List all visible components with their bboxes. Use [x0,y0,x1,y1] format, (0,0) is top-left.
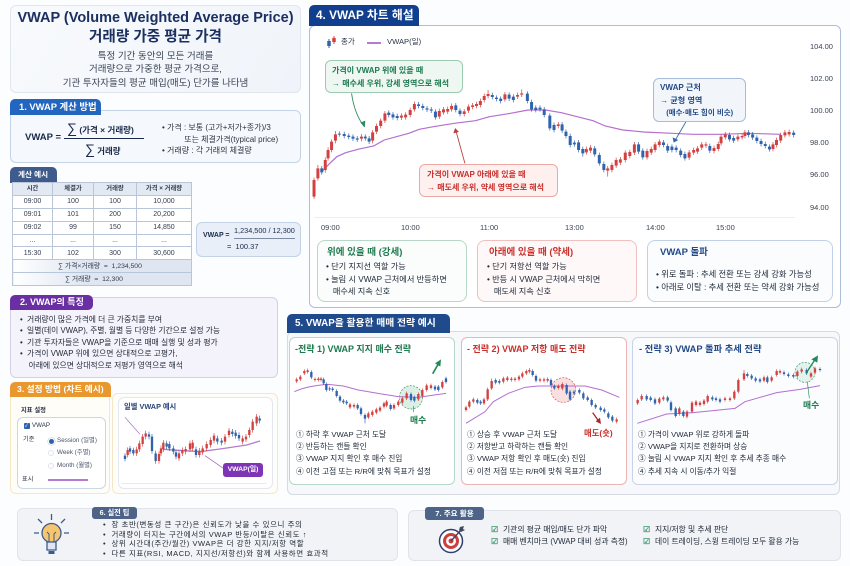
strategy 2 steps: ④ 이전 저점 또는 R/R에 맞춰 목표가 설정 [467,467,602,476]
table: calculation example: 14,850 [153,224,175,231]
example heading: 일별 VWAP 예시 [124,402,176,411]
strategy 1 steps: ③ VWAP 지지 확인 후 매수 진입 [296,454,402,463]
chart: daily VWAP candles [122,414,267,484]
formula notes: • 거래량 : 각 거래의 체결량 [162,146,252,155]
table: calculation example: 150 [109,224,121,231]
panel: daily VWAP example [112,393,278,494]
table: calculation example: 09:00 [24,198,41,205]
use 2: ☑ [491,537,498,546]
formula denominator: ∑ 거래량 [85,141,120,157]
card list: • 단기 저항선 역할 가능 [487,262,567,271]
table: calculation example: 30,600 [153,250,175,257]
table: calculation example: 300 [109,250,121,257]
chart: main candlesticks and VWAP [312,89,796,218]
example card [118,397,273,489]
y axis labels: 94.00 [810,203,829,212]
table: calculation example: ... [112,237,118,244]
y axis labels: 102.00 [810,74,833,83]
card list [656,269,819,292]
strategy 3 steps [638,430,786,476]
callout: above VWAP [325,60,463,93]
table: calculation example: 200 [109,211,121,218]
panel: VWAP features [10,297,278,378]
tag: section 4 [309,5,419,26]
formula notes: • 가격 : 보통 (고가+저가+종가)/3 [162,123,271,132]
chart: strategy 1 [294,359,448,424]
card list: • 반등 시 VWAP 근처에서 막히면 [487,275,600,284]
panel: VWAP chart interpretation [309,25,841,308]
checkbox VWAP [24,423,30,429]
strategy 3 steps: ④ 추세 지속 시 이동/추가 익절 [638,467,736,476]
use 4: ☑ [643,537,650,546]
table: calculation example: 100 [109,198,121,205]
table: calculation example [12,182,192,286]
tag: section 4: 4. VWAP 차트 해설 [316,8,414,22]
tag: section 2 [10,295,93,310]
x axis labels: 13:00 [565,223,584,232]
card heading: 아래에 있을 때 (약세) [489,247,573,258]
result fraction [234,225,295,239]
icon: light bulb [34,514,69,554]
legend close text: 종가 [341,37,355,46]
table: calculation example: 가격 × 거래량 [146,185,182,192]
tips list: • 장 초반(변동성 큰 구간)은 신뢰도가 낮을 수 있으니 주의 [103,520,303,529]
card list: • 눌림 시 VWAP 근처에서 반등하면 [326,275,447,284]
formula notes: 또는 체결가격(typical price) [184,134,278,144]
x axis labels: 09:00 [321,223,340,232]
icon: target [438,526,465,554]
radio week [48,450,54,456]
tag: section 5 [287,314,450,333]
panel: tips [17,508,398,561]
strategy 2 steps: ① 상승 후 VWAP 근처 도달 [467,430,557,439]
strategy 2 steps [467,430,602,476]
tag: section 3: 3. 설정 방법 (차트 예시) [17,384,104,394]
use 2: 매매 벤치마크 (VWAP 대비 성과 측정) [503,537,628,546]
table: calculation example: 09:02 [24,224,41,231]
tag: calculation example [10,167,57,183]
radio session [48,438,54,444]
settings heading: 지표 설정 [21,406,46,414]
feature list [20,314,220,370]
table: calculation example: 20,200 [153,211,175,218]
기준 label: 기준 [23,436,34,443]
table: calculation example: ∑ 거래량 = 12,300 [65,276,123,283]
legend candle icon [327,36,336,48]
tag: section 3 [10,382,111,397]
use 4: 데이 트레이딩, 스윙 트레이딩 모두 활용 가능 [655,537,799,546]
label: VWAP(일) [223,463,263,477]
label: VWAP(일): VWAP(일) [228,466,258,473]
line swatch [48,479,88,481]
callout: near VWAP: → 균형 영역 [660,96,702,104]
callout: above VWAP: → 매수세 우위, 강세 영역으로 해석 [332,79,449,88]
tag: section 5: 5. VWAP을 활용한 매매 전략 예시 [295,318,436,329]
card list: • 아래로 이탈 : 추세 전환 또는 약세 강화 가능성 [656,282,819,292]
tag: section 6 [92,507,137,519]
week label: Week (주별) [57,449,91,456]
tag: section 7 [425,507,484,520]
table: calculation example: 체결가 [64,185,82,192]
panel: strategy 3 [632,337,838,485]
chart: strategy 3 [636,355,822,424]
x axis labels: 14:00 [646,223,665,232]
table: calculation example: 101 [67,211,79,218]
table: calculation example: 09:01 [24,211,41,218]
settings box [17,417,106,489]
use 3: 지지/저항 및 추세 판단 [655,525,728,534]
result fraction: 1,234,500 / 12,300 [234,226,295,235]
card list: • 위로 돌파 : 추세 전환 또는 강세 강화 가능성 [656,269,812,279]
VWAP option: VWAP [32,422,50,429]
description [63,50,248,89]
card heading: 위에 있을 때 (강세) [327,247,402,258]
table: calculation example: ... [70,237,76,244]
strategy 3 steps: ③ 눌림 시 VWAP 지지 확인 후 추세 추종 매수 [638,454,786,463]
formula numerator: ∑ (가격 × 거래량) [67,120,134,136]
strategy 1 steps [296,430,431,476]
card list [487,262,600,296]
feature list: 아래에 있으면 상대적으로 저평가 영역으로 해석 [29,361,183,370]
panel: strategy 2 [461,337,627,485]
strategy 2 steps: ③ VWAP 저항 확인 후 매도(숏) 진입 [467,454,586,463]
chart: strategy 2 [464,368,620,424]
table: calculation example: ... [161,237,167,244]
strategy 1 steps: ④ 이전 고점 또는 R/R에 맞춰 목표가 설정 [296,467,431,476]
label: buy 3: 매수 [803,400,819,410]
session label: Session (일별) [57,437,97,444]
formula label: VWAP = [25,132,61,143]
feature list: • 가격이 VWAP 위에 있으면 상대적으로 고평가, [20,349,177,358]
tips list: • 거래량이 터지는 구간에서의 VWAP 반등/이탈은 신뢰도 ↑ [103,530,307,538]
callout: below VWAP [419,164,558,197]
panel: strategies [287,331,840,495]
description: 특정 기간 동안의 모든 거래를 [98,50,213,62]
radio month [48,463,54,469]
tag: calculation example: 계산 예시 [18,170,48,179]
card: VWAP breakout [647,240,833,302]
tips list: • 다른 지표(RSI, MACD, 지지선/저항선)와 함께 사용하면 효과적 [103,548,329,558]
callout: near VWAP: (매수·매도 힘이 비슷) [666,108,733,117]
strategy 1 heading: -전략 1) VWAP 지지 매수 전략 [295,344,411,354]
use 1: 기관의 평균 매입/매도 단가 파악 [503,525,607,534]
tips list: • 상위 시간대(주간/월간) VWAP은 더 강한 지지/저항 역할 [103,539,304,548]
legend: close [327,36,355,48]
table: calculation example: 102 [67,250,79,257]
title: English: VWAP (Volume Weighted Average Price) [17,10,294,26]
table: calculation example: 99 [69,224,77,231]
strategy 3 steps: ① 가격이 VWAP 위로 강하게 돌파 [638,430,749,439]
table: calculation example: 10,000 [153,198,175,205]
card list [326,262,447,296]
y axis labels: 96.00 [810,170,829,179]
table: calculation example: 15:30 [24,250,41,257]
panel: title [10,5,301,93]
table: calculation example: 100 [67,198,79,205]
callout: below VWAP: 가격이 VWAP 아래에 있을 때 [427,170,526,179]
card: below VWAP [477,240,637,302]
card list: 매도세 지속 신호 [494,287,551,296]
strategy 1 steps: ② 반등하는 캔들 확인 [296,442,367,451]
formula divider [64,138,144,139]
table: calculation example: 시간 [27,185,38,192]
strategy 2 heading: - 전략 2) VWAP 저항 매도 전략 [467,344,586,354]
표시 label: 표시 [22,476,33,483]
result label: VWAP = [203,232,230,239]
callout: near VWAP [653,78,746,122]
tag: section 2: 2. VWAP의 특징 [20,297,84,307]
y axis labels: 100.00 [810,106,833,115]
x axis labels: 11:00 [480,223,498,232]
table: calculation example: ∑ 가격×거래량 = 1,234,500 [58,263,142,270]
formula notes [162,123,278,155]
panel: main uses [408,510,841,561]
use 1: ☑ [491,525,498,534]
y axis labels: 98.00 [810,138,829,147]
tag: section 6: 6. 실전 팁 [100,508,129,517]
use 3: ☑ [643,525,650,534]
tag: section 1: 1. VWAP 계산 방법 [19,101,97,112]
panel: settings [10,391,110,494]
card heading: VWAP 돌파 [660,247,708,258]
description: 거래량으로 가중한 평균 가격으로, [89,64,222,75]
panel: VWAP calculation [10,110,301,163]
description: 기관 투자자들의 평균 매입(매도) 단가를 나타냄 [63,78,248,89]
tag: section 1 [10,99,101,115]
card list: • 단기 지지선 역할 가능 [326,262,406,271]
card list: 매수세 지속 신호 [333,287,390,296]
panel: strategy 1 [289,337,455,485]
label: sell short: 매도(숏) [584,428,613,438]
strategy 1 steps: ① 하락 후 VWAP 근처 도달 [296,430,386,439]
strategy 3 steps: ② VWAP을 지지로 전환하며 상승 [638,442,747,451]
y axis labels [810,42,833,212]
feature list: • 일별(데이 VWAP), 주별, 월별 등 다양한 기간으로 설정 가능 [20,326,220,335]
callout: VWAP result [196,222,301,257]
strategy 3 heading: - 전략 3) VWAP 돌파 추세 전략 [639,344,762,354]
card: above VWAP [317,240,467,302]
table: calculation example: 거래량 [106,185,124,192]
checkbox VWAP: ✓ [25,423,28,429]
table: calculation example: ... [30,237,35,244]
legend VWAP text: VWAP(일) [387,37,421,46]
tips list [103,520,329,558]
feature list: • 기관 투자자들은 VWAP을 기준으로 매매 실행 및 성과 평가 [20,338,218,347]
legend line swatch [367,42,381,44]
feature list: • 거래량이 많은 가격에 더 큰 가중치를 부여 [20,314,162,324]
x axis labels [321,223,735,232]
callout: near VWAP: VWAP 근처 [660,83,701,92]
callout: above VWAP: 가격이 VWAP 위에 있을 때 [332,66,423,75]
y axis labels: 104.00 [810,42,833,51]
tag: section 7: 7. 주요 활용 [435,509,474,518]
label: buy 1: 매수 [410,415,426,425]
x axis labels: 10:00 [401,223,420,232]
strategy 2 steps: ② 저항받고 하락하는 캔들 확인 [467,442,568,451]
callout: below VWAP: → 매도세 우위, 약세 영역으로 해석 [427,183,544,192]
x axis labels: 15:00 [716,223,735,232]
result value: = 100.37 [227,242,258,251]
month label: Month (월별) [57,462,92,469]
title: Korean: 거래량 가중 평균 가격 [89,29,222,45]
